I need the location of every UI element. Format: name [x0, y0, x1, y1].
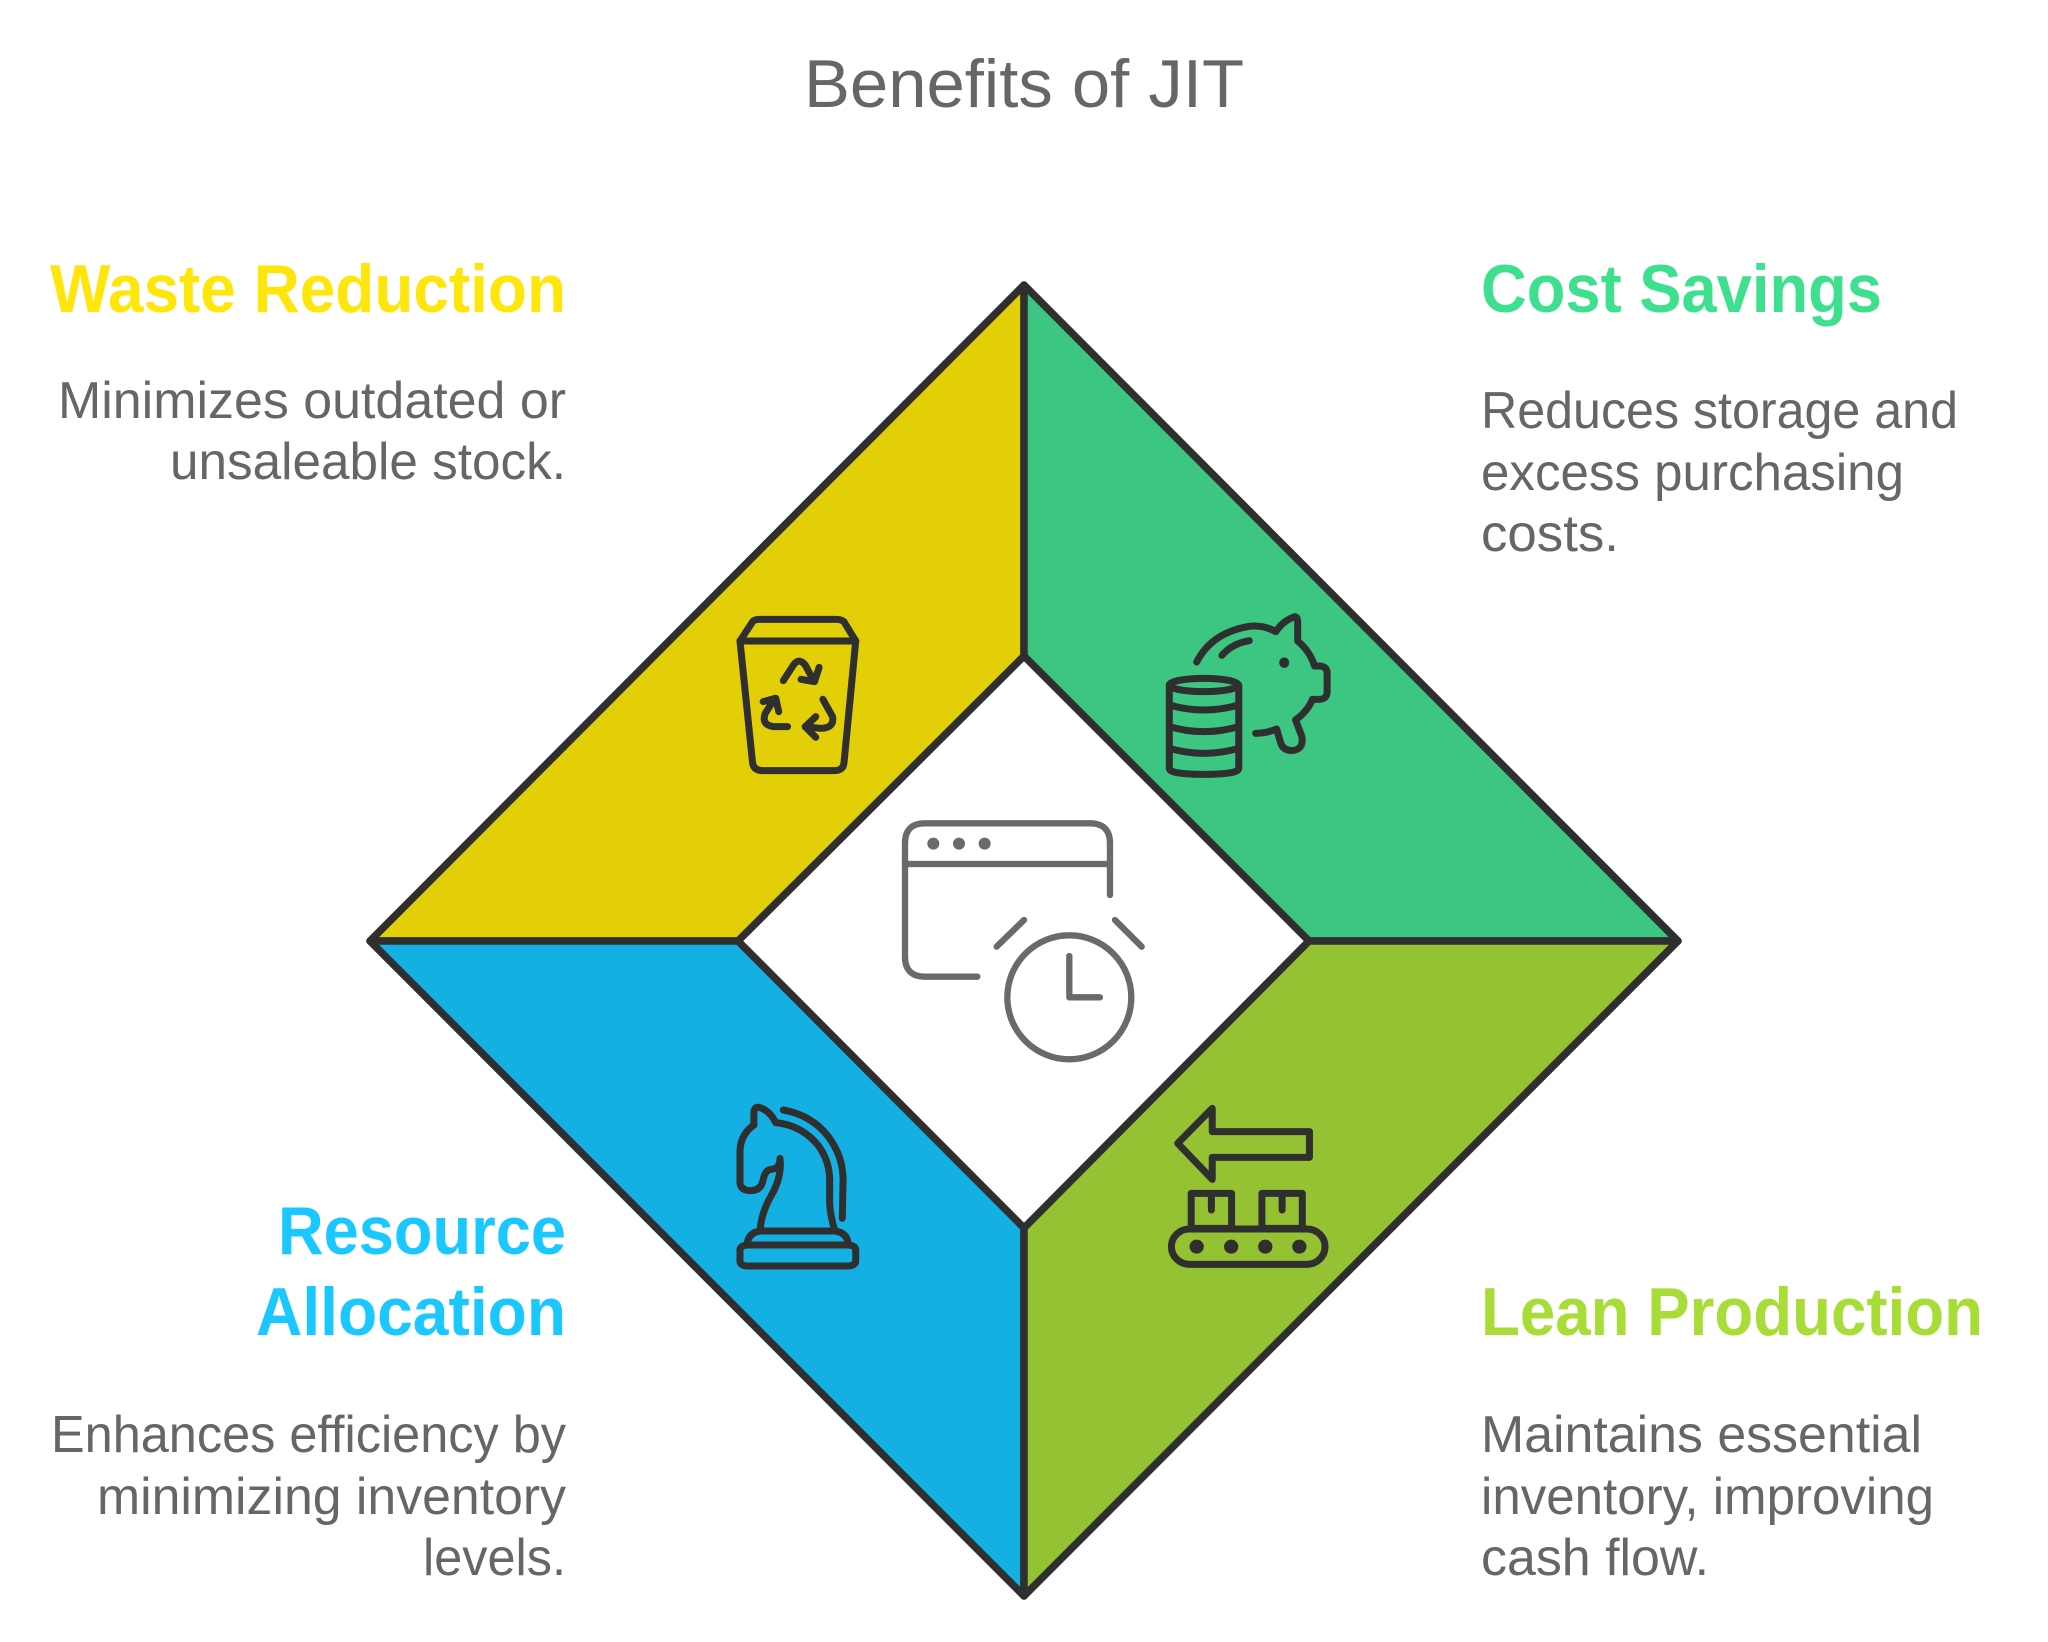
icon: conveyor belt with arrow — [1171, 1108, 1325, 1264]
text block: waste reduction — [50, 251, 566, 491]
title: Benefits of JIT — [804, 46, 1244, 122]
icon: piggy bank and coins — [1169, 617, 1327, 774]
segment: cost savings — [1024, 285, 1678, 941]
description: resource allocation — [51, 1406, 566, 1587]
heading: cost savings: Cost Savings — [1481, 251, 1882, 327]
segment: lean production — [1024, 941, 1678, 1596]
description: cost savings: costs. — [1481, 505, 1619, 563]
text block: lean production — [1481, 1274, 1983, 1587]
diamond chart — [370, 285, 1678, 1596]
text block: resource allocation — [51, 1193, 566, 1587]
description: waste reduction: Minimizes outdated or — [58, 372, 566, 430]
heading: resource allocation: Resource — [278, 1193, 566, 1269]
description: cost savings: Reduces storage and — [1481, 382, 1958, 440]
segment: waste reduction — [370, 285, 1024, 941]
segment: resource allocation — [370, 941, 1024, 1596]
description: cost savings: excess purchasing — [1481, 444, 1904, 502]
icon: recycling bin — [740, 619, 856, 771]
icon: chess knight — [740, 1107, 856, 1266]
heading: resource allocation — [256, 1193, 566, 1350]
icon: browser window with clock — [905, 823, 1142, 1059]
description: lean production: inventory, improving — [1481, 1468, 1934, 1526]
description: waste reduction — [58, 372, 566, 491]
description: cost savings — [1481, 382, 1958, 563]
description: resource allocation: Enhances efficiency by — [51, 1406, 566, 1464]
description: lean production: cash flow. — [1481, 1529, 1709, 1587]
description: resource allocation: levels. — [423, 1529, 566, 1587]
description: lean production — [1481, 1406, 1934, 1587]
text block: cost savings — [1481, 251, 1958, 563]
description: resource allocation: minimizing inventory — [97, 1468, 566, 1526]
description: lean production: Maintains essential — [1481, 1406, 1922, 1464]
description: waste reduction: unsaleable stock. — [170, 433, 566, 491]
heading: lean production: Lean Production — [1481, 1274, 1983, 1350]
heading: resource allocation: Allocation — [256, 1274, 566, 1350]
heading: waste reduction: Waste Reduction — [50, 251, 566, 327]
